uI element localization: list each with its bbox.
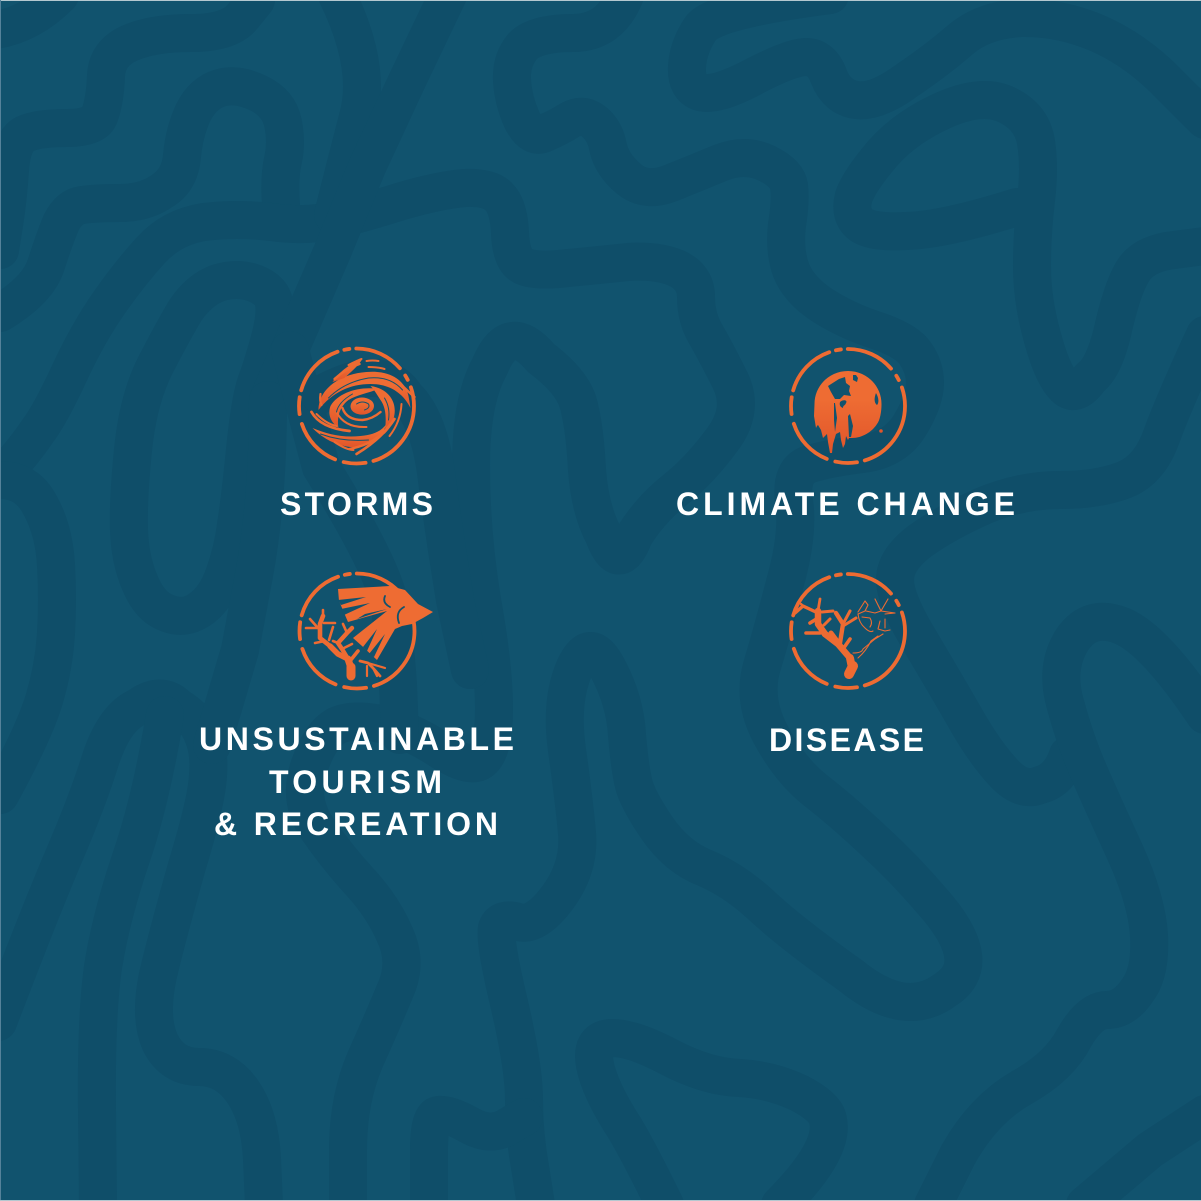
dashed ring [300,574,414,688]
label: unsustainable tourism and recreation [199,721,514,842]
healthy coral half [795,599,856,674]
spiral teal feather lines [320,378,402,440]
label: storms: STORMS [280,486,433,522]
icon: disease [791,574,905,688]
melting globe [814,371,882,453]
dashed ring [791,349,905,463]
hurricane spiral [312,359,410,447]
coral [306,610,385,676]
icon: storms [299,348,414,464]
dashed ring [299,348,414,464]
dashed ring [791,574,905,688]
label: unsustainable tourism and recreation: TOURISM [269,764,442,800]
melt droplet [879,429,883,433]
label: unsustainable tourism and recreation: UNSUSTAINABLE [199,721,514,757]
label: climate change: CLIMATE CHANGE [676,486,1015,522]
icon: unsustainable tourism [300,574,433,688]
icon: climate change [791,349,905,463]
spiral fine strokes [312,359,414,454]
bleached coral outline half [853,599,895,658]
bird [338,586,433,660]
label: disease: DISEASE [769,722,924,758]
globe ocean cutouts [828,375,878,437]
label: unsustainable tourism and recreation: & RECREATION [214,806,498,842]
